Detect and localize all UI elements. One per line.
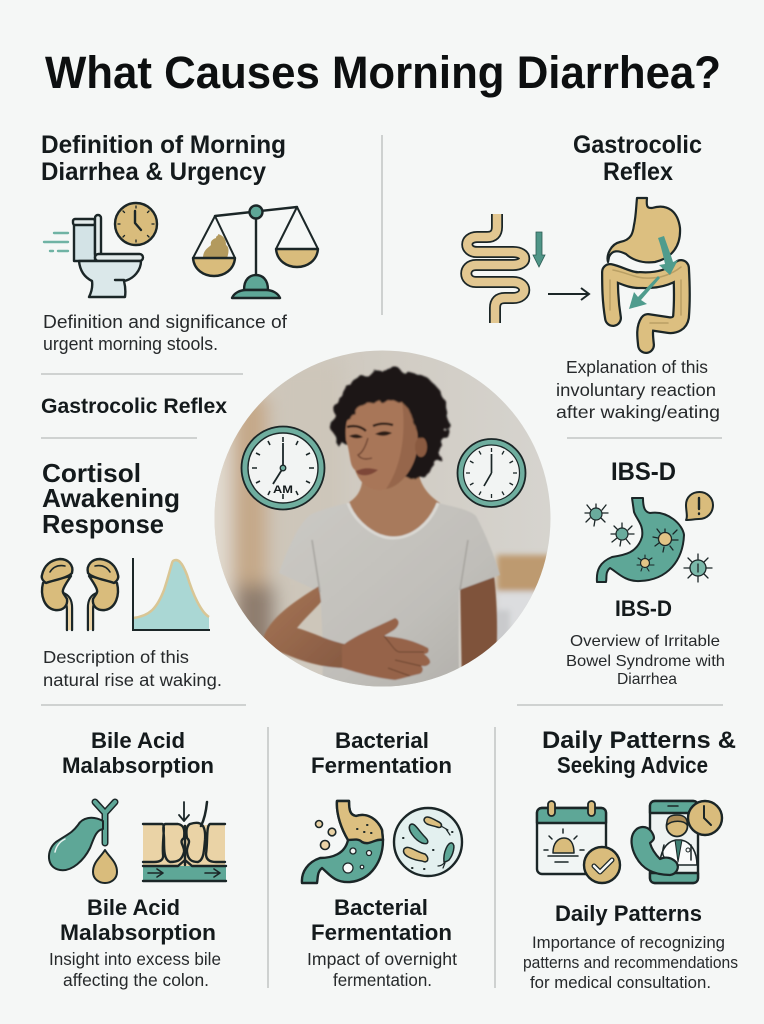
mouth [356,468,378,475]
subheading: bile acid: Bile Acid [87,895,180,920]
left arm [264,586,352,668]
text: gastrocolic body: Explanation of this [566,357,708,377]
icon: teal reflex arrows [629,236,678,309]
heading: IBS-D top: IBS-D [611,458,676,486]
subheading: gastrocolic reflex left: Gastrocolic Reflex [41,395,227,418]
text: IBS-D body: Overview of Irritable [570,633,720,650]
nose [358,438,372,459]
text: bile acid body: Insight into excess bile [49,949,221,969]
text: gastrocolic body: after waking/eating [556,402,720,422]
photo backdrop [200,345,557,690]
hand [342,618,430,680]
alert bubble [686,492,713,520]
ear [415,437,427,457]
title: What Causes Morning Diarrhea? [45,47,721,98]
icon: gallbladder and bile drop [49,802,117,883]
neck [348,470,440,538]
heading: bile acid: Malabsorption [62,753,214,778]
icon: toilet with speed lines [44,215,143,297]
icon: check badge [584,847,620,883]
icon: fermenting stomach [302,801,383,883]
woman figure [264,369,500,692]
icon: stomach and colon [608,198,682,345]
icon: colon wall cells [143,802,226,881]
collar [348,503,438,538]
heading: cortisol: Awakening [42,483,180,513]
subheading: IBS-D: IBS-D [615,596,672,621]
microbe [590,508,602,520]
heading: daily patterns: Daily Patterns & [542,727,736,754]
icon: stomach with microbes [585,492,713,582]
text: daily patterns body: Importance of recognizing [532,933,725,952]
subheading: bacterial: Fermentation [311,920,452,945]
panel: daily patterns and seeking advice [523,727,738,992]
text: cortisol body: Description of this [43,647,189,667]
icon: down arrow [533,232,545,267]
panel: bile acid malabsorption [49,728,226,990]
right arm [459,576,498,667]
photo: worried woman holding stomach [200,345,557,692]
hair back [331,369,448,480]
chart: cortisol curve [133,558,210,630]
virus [690,560,706,576]
heading: cortisol: Response [42,509,164,539]
icon: phone with doctor [632,801,722,883]
text: gastrocolic body: involuntary reaction [556,380,716,400]
text: IBS-D body: Diarrhea [617,671,677,688]
text: daily patterns body: for medical consultation. [530,973,711,992]
text: bacterial body: Impact of overnight [307,949,457,969]
icon: small intestine [466,214,524,323]
shirt [279,503,500,692]
text: IBS-D body: Bowel Syndrome with [566,653,725,670]
panel: bacterial fermentation [302,728,462,990]
heading: definition: Definition of Morning [41,131,286,159]
panel: IBS-D [566,458,725,688]
text: bacterial body: fermentation. [333,970,432,990]
heading: daily patterns: Seeking Advice [557,752,708,778]
heading: bacterial: Fermentation [311,753,452,778]
heading: gastrocolic reflex: Reflex [603,158,673,186]
icon: balance scale [193,206,318,298]
subheading: bacterial: Bacterial [334,895,428,920]
heading: bile acid: Bile Acid [91,728,185,753]
icon: calendar with sunrise [537,801,606,874]
panel: definition of morning diarrhea [41,131,318,354]
eyes [349,431,392,438]
text: definition body: urgent morning stools. [43,333,218,354]
heading: bacterial: Bacterial [335,728,429,753]
subheading: daily patterns: Daily Patterns [555,901,702,926]
heading: definition: Diarrhea & Urgency [41,158,266,186]
sleeve shading [312,540,468,592]
text: daily patterns body: patterns and recommendations [523,953,738,972]
panel: cortisol awakening response [42,458,222,690]
eyebrows [347,424,393,431]
text: bile acid body: affecting the colon. [63,970,209,990]
face [346,396,418,490]
text: definition body: Definition and significance of [43,311,288,332]
heading: gastrocolic reflex: Gastrocolic [573,131,702,159]
icon: kidneys [42,559,118,630]
icon: right clock [458,439,526,507]
icon: bacteria under microscope [394,808,462,876]
subheading: bile acid: Malabsorption [60,920,216,945]
clock label AM: AM [273,484,293,496]
icon: clock [115,203,157,245]
heading: cortisol: Cortisol [42,458,141,488]
divider lines [41,135,723,988]
icon: right arrow [548,288,589,300]
hair front curls [333,394,424,448]
text: cortisol body: natural rise at waking. [43,670,222,690]
microbe [616,528,628,540]
panel: gastrocolic reflex right [466,131,720,422]
icon: left clock AM [242,426,324,510]
